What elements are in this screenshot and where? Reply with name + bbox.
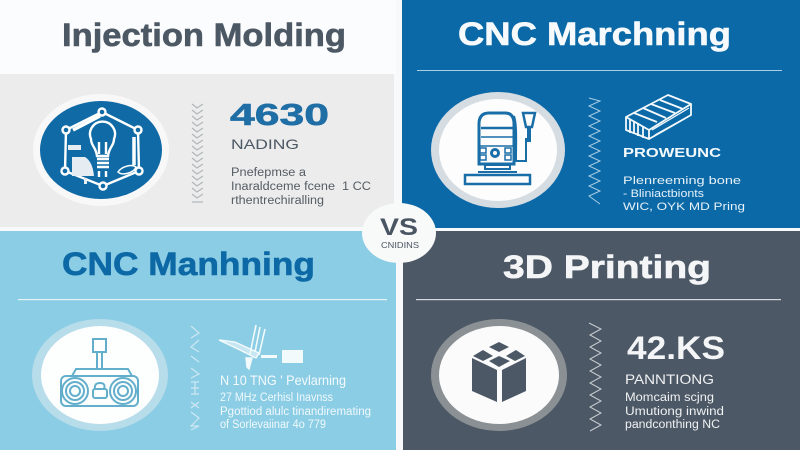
heading: 3d printing: 3D Printing	[503, 249, 711, 285]
label: n 10 tng pevlarning: N 10 TNG ' Pevlarning	[220, 372, 346, 388]
stat: 4630: 4630	[230, 97, 329, 132]
body text: WIC, OYK MD Pring	[623, 201, 745, 213]
body text	[231, 167, 371, 207]
icon: molding badge	[33, 94, 169, 206]
body text: Plenreeming bone	[623, 175, 741, 187]
panel: 3d printing	[403, 231, 800, 450]
icon: cube badge	[431, 319, 567, 431]
body text: Inaraldceme fcene	[231, 181, 335, 193]
icon: cutting tool	[219, 325, 303, 369]
panel: cnc manhning	[0, 231, 396, 450]
icon: machine head badge	[32, 319, 168, 431]
icon: cnc machine badge	[431, 92, 565, 208]
vs badge	[362, 203, 436, 263]
body text: 1 CC	[342, 181, 371, 193]
zigzag divider	[589, 98, 600, 204]
body text: pandconthing NC	[625, 419, 720, 431]
panel: injection molding	[0, 0, 396, 227]
body text: Momcaim scjng	[625, 392, 714, 404]
heading: cnc manhning: CNC Manhning	[62, 246, 315, 282]
vs badge: CNIDINS	[381, 240, 419, 250]
body text: rthentrechiralling	[231, 195, 324, 207]
body text: of Sorlevaiinar 4o 779	[220, 419, 326, 431]
icon: striped block	[626, 95, 691, 139]
vs badge: VS	[380, 214, 418, 241]
stat: 42.ks: 42.KS	[627, 330, 725, 366]
panel: cnc marchning	[402, 0, 800, 228]
heading: injection molding: Injection Molding	[62, 17, 346, 53]
body text: Umutiong inwind	[625, 406, 724, 418]
zigzag divider	[191, 326, 199, 430]
body text	[625, 392, 724, 431]
label: nading: NADING	[231, 136, 299, 152]
heading: cnc marchning: CNC Marchning	[458, 16, 731, 52]
body text	[220, 392, 371, 431]
body text: Pgottiod alulc tinandiremating	[220, 406, 371, 418]
body text	[623, 175, 745, 213]
body text: Pnefepmse a	[231, 167, 307, 179]
label: panntiong: PANNTIONG	[625, 371, 714, 387]
zigzag divider	[589, 323, 601, 431]
label: proweunc: PROWEUNC	[623, 145, 722, 160]
zigzag divider	[192, 104, 203, 202]
body text: - Bliniactbionts	[623, 188, 705, 200]
body text: 27 MHz Cerhisl Inavnss	[220, 392, 333, 404]
